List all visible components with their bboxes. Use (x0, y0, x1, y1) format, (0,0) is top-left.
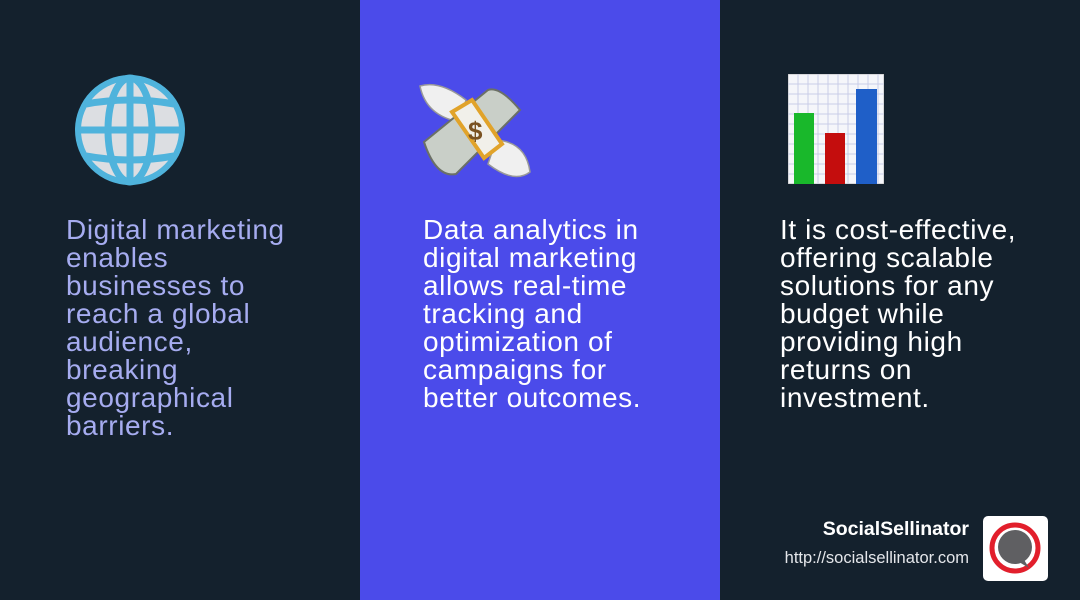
text: cost effective: returns on (780, 354, 912, 385)
text: data analytics: better outcomes. (423, 382, 641, 413)
text: data analytics: optimization of (423, 326, 613, 357)
text: cost effective: It is cost-effective, (780, 214, 1016, 245)
text: global reach: geographical (66, 382, 234, 413)
brand name: SocialSellinator (823, 518, 969, 540)
text: global reach (66, 214, 285, 441)
text: global reach: breaking (66, 354, 178, 385)
icon: bar chart (788, 74, 884, 184)
text: data analytics (423, 214, 641, 413)
text: global reach: audience, (66, 326, 193, 357)
brand url: http://socialsellinator.com (785, 549, 969, 567)
icon: money with wings: $ (468, 116, 483, 146)
text: global reach: enables (66, 242, 168, 273)
text: cost effective: solutions for any (780, 270, 994, 301)
text: cost effective: providing high (780, 326, 963, 357)
text: data analytics: digital marketing (423, 242, 637, 273)
text: data analytics: campaigns for (423, 354, 607, 385)
text: cost effective: budget while (780, 298, 944, 329)
text: data analytics: tracking and (423, 298, 583, 329)
panel: global reach (0, 0, 360, 600)
text: data analytics: allows real-time (423, 270, 627, 301)
text: cost effective: offering scalable (780, 242, 994, 273)
text: global reach: Digital marketing (66, 214, 285, 245)
icon: money with wings (419, 84, 531, 178)
text: cost effective: investment. (780, 382, 930, 413)
icon: globe (75, 74, 185, 186)
text: global reach: reach a global (66, 298, 250, 329)
text: global reach: businesses to (66, 270, 245, 301)
panel: data analytics (360, 0, 720, 600)
text: global reach: barriers. (66, 410, 174, 441)
text: cost effective (780, 214, 1016, 413)
logo (983, 516, 1048, 581)
panel: cost effective (720, 0, 1080, 600)
text: data analytics: Data analytics in (423, 214, 639, 245)
